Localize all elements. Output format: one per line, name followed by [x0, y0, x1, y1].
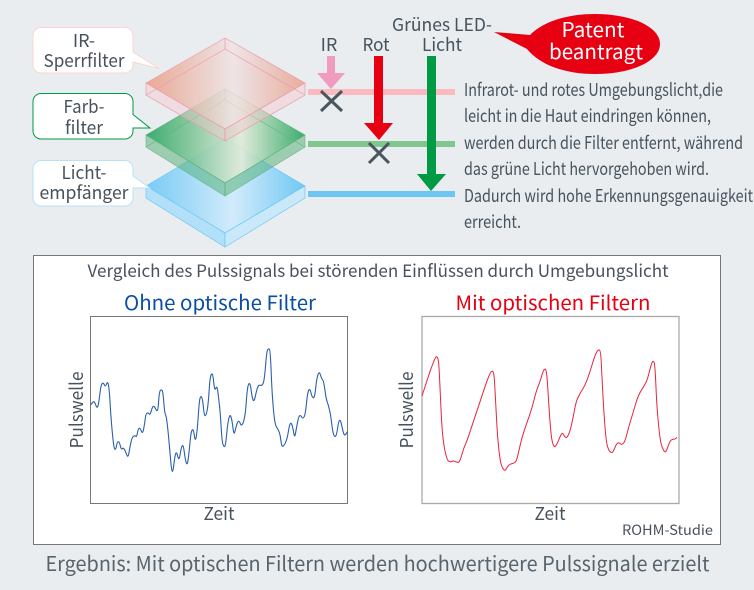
callout: Lichtempfänger [33, 159, 150, 206]
panel: comparison [34, 256, 720, 544]
axis label: Pulswelle: Pulswelle [393, 371, 419, 448]
arrow: red [364, 56, 393, 140]
badge: Patent beantragt: Patent [562, 13, 625, 43]
result statement: Ergebnis: Mit optischen Filtern werden hochwertigere Pulssignale erzielt [46, 547, 710, 577]
layer: IR cut filter [146, 38, 305, 141]
callout: IR-Sperrfilter: IR- [73, 27, 95, 53]
callout: IR-Sperrfilter: Sperrfilter [44, 47, 125, 73]
callout: IR-Sperrfilter [33, 27, 159, 73]
label: Grünes LED-Licht [392, 11, 492, 57]
callout: Farbfilter: filter [65, 114, 104, 140]
explanation text: erreicht. [464, 209, 521, 234]
label: Rot: Rot [362, 31, 390, 57]
chart title: without filter: Ohne optische Filter [124, 287, 316, 316]
axis label: Pulswelle: Pulswelle [63, 371, 89, 448]
callout: Farbfilter: Farb- [64, 93, 104, 119]
label: Grünes LED-Licht: Licht [422, 31, 462, 57]
arrow: IR [317, 56, 345, 89]
explanation text [464, 77, 753, 234]
callout: Lichtempfänger: empfänger [40, 179, 129, 205]
panel heading: Vergleich des Pulssignals bei störenden Einflüssen durch Umgebungslicht [88, 257, 669, 282]
label: Grünes LED-Licht: Grünes LED- [392, 11, 492, 37]
axis label: Zeit: Zeit [204, 500, 235, 526]
blue light band [308, 191, 455, 197]
blocked mark: IR [321, 91, 342, 111]
callout: Lichtempfänger: Licht- [62, 159, 106, 185]
callout: Farbfilter [33, 93, 150, 140]
arrow: green LED [417, 56, 446, 191]
green light band [308, 141, 455, 147]
chart title: with filter: Mit optischen Filtern [456, 287, 650, 316]
blocked mark: red [369, 143, 389, 163]
pink light band [308, 89, 455, 95]
badge: Patent beantragt: beantragt [549, 35, 643, 65]
badge: Patent beantragt [494, 13, 660, 74]
chart: noisy pulse wave [63, 316, 348, 526]
label: IR: IR [321, 31, 337, 57]
layer: light receiver [146, 139, 305, 247]
source note: ROHM-Studie [622, 520, 713, 540]
axis label: Zeit: Zeit [534, 500, 566, 526]
chart: clean pulse wave [393, 316, 679, 526]
layer: colour filter [146, 89, 305, 196]
